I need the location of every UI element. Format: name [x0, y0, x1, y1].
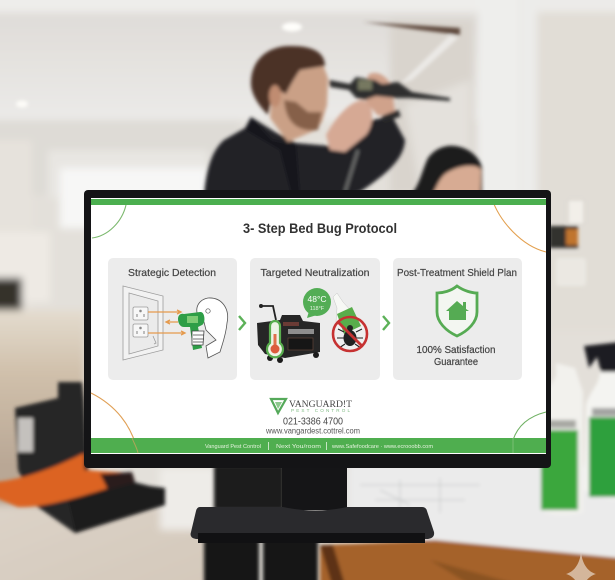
contact details: www.vangardest.cottrel.com — [265, 426, 360, 436]
icon: house shield — [437, 286, 477, 336]
logo: Vanguard pest control — [271, 399, 352, 413]
guarantee text: 100% Satisfaction — [416, 345, 496, 356]
sparkle watermark — [566, 553, 596, 580]
guarantee text — [416, 345, 496, 368]
drill — [329, 77, 450, 101]
panel: post-treatment shield plan — [393, 258, 522, 380]
icon: scan arrows — [148, 310, 185, 335]
heading: Targeted Neutralization — [260, 268, 370, 279]
heading: Post-Treatment Shield Plan — [397, 268, 517, 279]
top green bar — [91, 199, 546, 205]
icon: spray bottle and crossed-out bug — [333, 293, 367, 351]
decorative corner arcs — [91, 199, 546, 453]
woman — [410, 146, 482, 196]
footer bar: www.Safefoodcare · www.ecrooobb.com — [331, 444, 433, 450]
icon: temperature bubble: 118°F — [310, 306, 325, 312]
icon: temperature bubble: 48°C — [308, 294, 326, 304]
guarantee text: Guarantee — [434, 357, 478, 368]
icon: thermometer — [267, 321, 283, 357]
monitor screen — [91, 198, 546, 454]
arrow: step 2 to 3 — [383, 316, 389, 330]
panel: targeted neutralization — [250, 258, 380, 380]
icon: heater machine — [257, 304, 320, 363]
logo: Vanguard pest control: PEST CONTROL — [291, 408, 350, 413]
legs of man — [214, 465, 284, 510]
contact details: 021-3386 4700 — [283, 416, 343, 428]
hair — [251, 46, 325, 115]
panel: strategic detection — [108, 258, 237, 380]
neck and face — [270, 60, 328, 142]
stand base — [191, 507, 434, 539]
footer bar: Next You/room — [276, 444, 321, 450]
background person with drill — [204, 46, 482, 580]
icon: wall outlet panel — [123, 286, 163, 360]
footer bar — [91, 438, 546, 453]
icon: technician with thermal scanner — [178, 298, 228, 358]
white and green bottle — [541, 363, 583, 515]
table and spray bottles — [320, 342, 615, 580]
arrow: step 1 to 2 — [239, 316, 245, 330]
title: 3- Step Bed Bug Protocol — [243, 221, 397, 237]
monitor bezel — [84, 190, 551, 468]
hands — [326, 100, 372, 152]
second spray bottle — [584, 370, 615, 500]
equipment case and orange hose — [0, 382, 165, 533]
contact details — [265, 416, 360, 436]
logo: Vanguard pest control: VANGUARD!T — [289, 399, 352, 409]
footer bar: Vanguard Pest Control — [205, 444, 261, 450]
icon: temperature bubble — [303, 288, 331, 318]
monitor stand — [191, 468, 434, 543]
small background fragments — [16, 22, 586, 286]
shirt — [204, 116, 405, 196]
heading: Strategic Detection — [128, 268, 216, 279]
